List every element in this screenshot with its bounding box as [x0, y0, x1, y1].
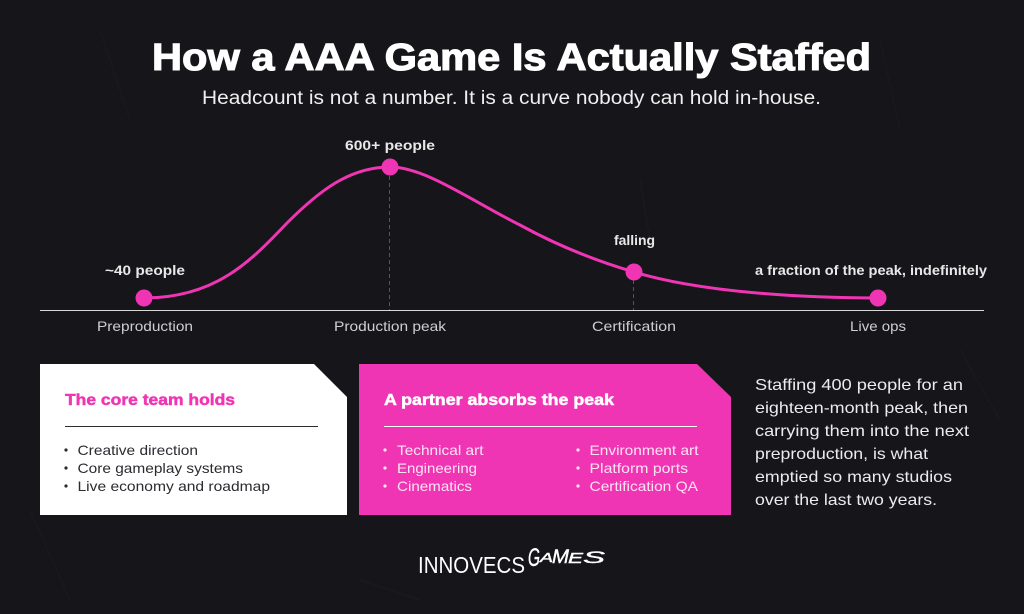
logo: Innovecs Games: G — [528, 544, 540, 572]
text block: staffing commentary — [755, 377, 970, 509]
logo: Innovecs Games: INNOVECS — [418, 552, 525, 578]
axis line — [40, 310, 984, 312]
label: fraction of the peak: a fraction of the peak, indefinitely — [755, 262, 987, 278]
text block: staffing commentary: carrying them into the next — [755, 423, 970, 440]
text block: staffing commentary: Staffing 400 people for an — [755, 377, 963, 394]
axis label: production peak: Production peak — [334, 318, 447, 334]
logo: Innovecs Games: S — [583, 548, 606, 567]
point: preproduction — [136, 290, 152, 306]
logo: Innovecs Games: M — [552, 547, 569, 568]
core team list: Live economy and roadmap — [78, 478, 270, 494]
partner list: left column: Cinematics — [397, 478, 472, 494]
logo: Innovecs Games — [418, 544, 606, 578]
label: 600+ people: 600+ people — [345, 137, 435, 153]
peak drop line — [388, 176, 390, 310]
text block: staffing commentary: preproduction, is what — [755, 446, 929, 463]
core team list: Core gameplay systems — [78, 460, 243, 476]
text block: staffing commentary: emptied so many studios — [755, 469, 952, 486]
partner list: left column: Engineering — [397, 460, 477, 476]
subtitle: Headcount is not a number. It is a curve nobody can hold in-house. — [202, 88, 821, 109]
panel: core team — [40, 364, 347, 515]
title: How a AAA Game Is Actually Staffed — [152, 37, 871, 79]
partner list: right column: Platform ports — [590, 460, 688, 476]
text block: staffing commentary: over the last two years. — [755, 492, 937, 509]
panel: partner — [359, 364, 731, 515]
point: production peak — [382, 158, 398, 176]
text block: staffing commentary: eighteen-month peak, then — [755, 400, 968, 417]
logo: Innovecs Games: A — [539, 550, 553, 565]
panel heading: The core team holds — [65, 392, 235, 409]
partner list: right column: Certification QA — [590, 478, 699, 494]
core team list: Creative direction — [78, 442, 198, 458]
point: certification — [626, 264, 642, 280]
point: live ops — [870, 290, 886, 306]
panel background — [40, 364, 347, 515]
partner list: left column — [383, 442, 484, 494]
label: falling: falling — [614, 232, 655, 248]
panel heading: A partner absorbs the peak — [384, 392, 614, 409]
axis label: live ops: Live ops — [850, 318, 906, 334]
axis label: certification: Certification — [592, 318, 676, 334]
axis label: preproduction: Preproduction — [97, 318, 193, 334]
core team list — [64, 442, 270, 494]
partner list: right column: Environment art — [590, 442, 699, 458]
partner list: right column — [576, 442, 699, 494]
panel background — [359, 364, 731, 515]
logo: Innovecs Games: E — [568, 550, 584, 567]
label: ~40 people: ~40 people — [105, 262, 185, 278]
certification drop line — [632, 280, 634, 310]
chart: headcount curve — [40, 137, 987, 334]
partner list: left column: Technical art — [397, 442, 484, 458]
curve — [144, 167, 878, 298]
